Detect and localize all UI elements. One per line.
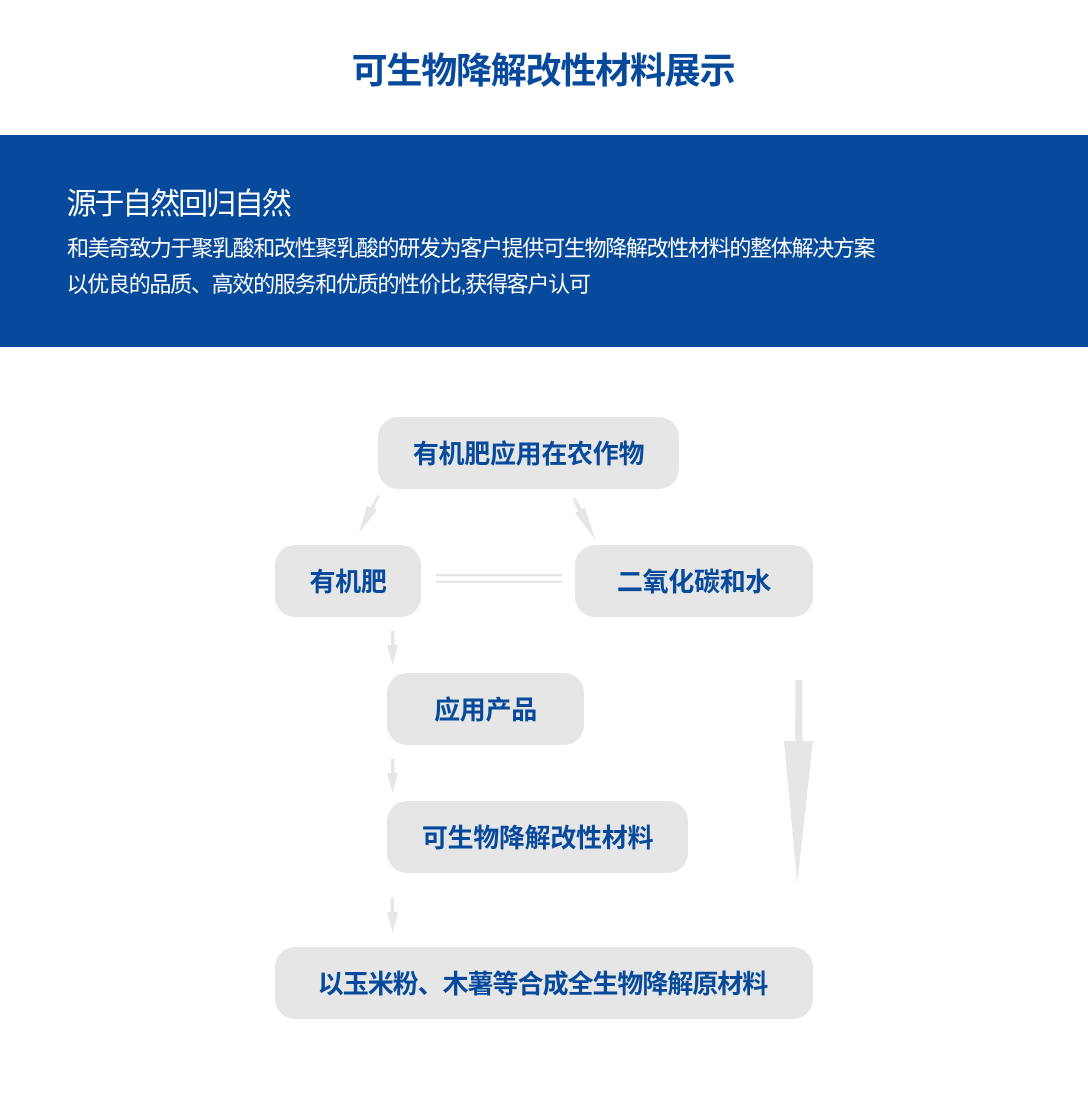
- node: carbon dioxide and water: [575, 545, 813, 617]
- node: organic fertilizer: 有机肥: [309, 567, 387, 597]
- arrow: products to materials: [387, 759, 398, 793]
- arrow: materials to raw materials: [387, 898, 398, 933]
- node: raw materials: 以玉米粉、木薯等合成全生物降解原材料: [318, 969, 767, 999]
- node: biodegradable modified materials: [387, 801, 688, 873]
- node: biodegradable modified materials: 可生物降解改性材料: [422, 823, 653, 853]
- node: application products: 应用产品: [434, 695, 537, 725]
- banner heading: 源于自然回归自然: [66, 188, 290, 221]
- panel: intro banner: [0, 135, 1088, 347]
- node: organic fertilizer applied to crops: [378, 417, 679, 489]
- banner text line 1: 和美奇致力于聚乳酸和改性聚乳酸的研发为客户提供可生物降解改性材料的整体解决方案: [67, 236, 874, 261]
- arrow: crops to carbon dioxide and water: [572, 497, 596, 540]
- arrow: large down arrow: [784, 680, 813, 884]
- node: organic fertilizer applied to crops: 有机肥应用在农作物: [413, 439, 644, 469]
- node: organic fertilizer: [275, 545, 421, 617]
- title: 可生物降解改性材料展示: [352, 50, 734, 91]
- node: raw materials: [275, 947, 813, 1019]
- arrow: crops to organic fertilizer: [359, 495, 380, 533]
- node: carbon dioxide and water: 二氧化碳和水: [617, 567, 771, 597]
- connector: double line: [436, 574, 562, 583]
- arrow: organic fertilizer to products: [387, 631, 398, 665]
- node: application products: [387, 673, 584, 745]
- banner text line 2: 以优良的品质、高效的服务和优质的性价比,获得客户认可: [66, 272, 590, 297]
